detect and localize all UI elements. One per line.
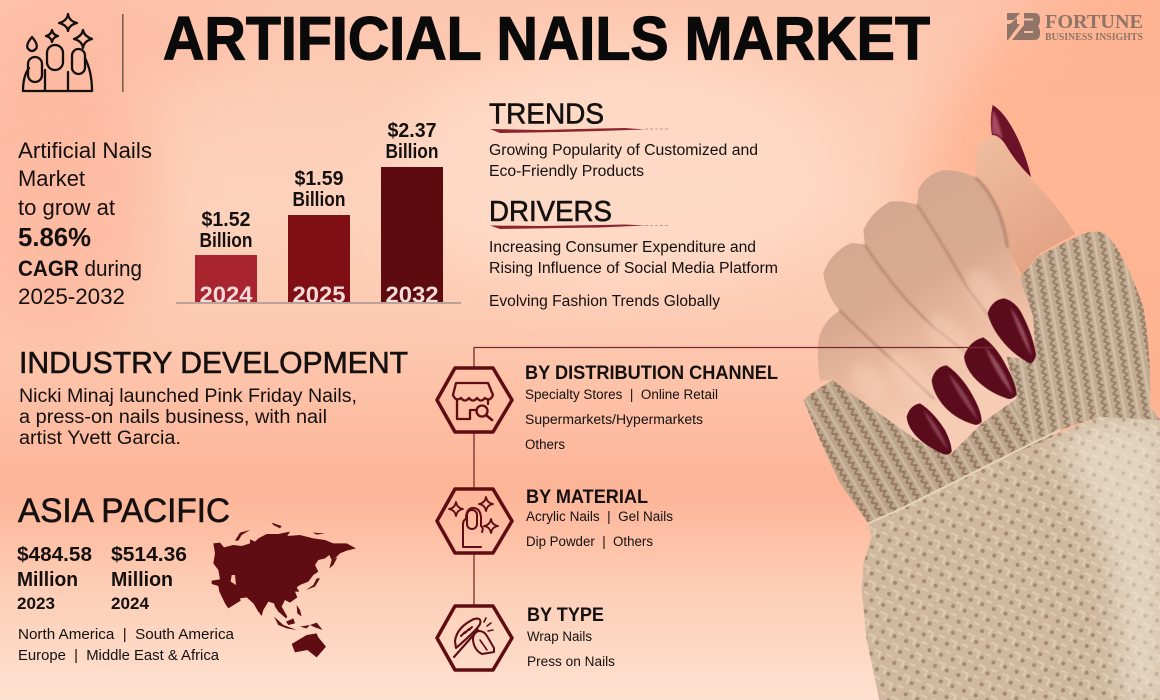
logo: Fortune Business Insights: FORTUNE (1045, 11, 1143, 33)
segment: by material: Acrylic Nails | Gel Nails (526, 509, 673, 524)
segment: by material (437, 487, 673, 553)
bar 2024: $1.52 (202, 209, 250, 231)
title: ARTIFICIAL NAILS MARKET (163, 4, 930, 72)
fingers silhouette (818, 170, 1035, 453)
sweater cuff right (1007, 231, 1160, 443)
segment: by distribution channel: Others (525, 437, 565, 452)
header divider (122, 14, 124, 92)
asia pacific: $484.58 (17, 544, 92, 566)
nail: index (988, 298, 1036, 363)
growth statement: CAGR during (18, 256, 142, 281)
bar 2032 (381, 120, 443, 308)
bar 2024 (195, 209, 257, 308)
thumb (976, 134, 1075, 275)
bar 2024: 2024 (200, 282, 252, 308)
asia pacific: Million (17, 569, 78, 591)
sweater body (862, 417, 1160, 700)
asia pacific: ASIA PACIFIC (18, 492, 230, 530)
industry development: artist Yvett Garcia. (19, 428, 181, 449)
bar 2025: 2025 (292, 282, 346, 308)
segment: by material: Dip Powder | Others (526, 534, 653, 549)
nail: little (907, 403, 952, 455)
segment: by distribution channel: BY DISTRIBUTION CHANNEL (525, 363, 778, 384)
growth statement: to grow at (18, 195, 115, 220)
drivers: Increasing Consumer Expenditure and (489, 239, 756, 256)
segment: by distribution channel: Specialty Stores | Online Retail (525, 387, 718, 402)
asia pacific: 2023 (17, 594, 55, 613)
map: Asia Pacific (212, 523, 356, 657)
bar 2032: Billion (386, 141, 438, 163)
drivers (489, 196, 778, 310)
industry development: INDUSTRY DEVELOPMENT (19, 345, 408, 380)
bar 2025 (288, 168, 350, 308)
growth statement: 5.86% (18, 222, 91, 252)
logo: Fortune Business Insights (1007, 11, 1143, 43)
connector line (474, 348, 993, 606)
segment: by distribution channel: Supermarkets/Hypermarkets (525, 412, 703, 427)
bar 2032: 2032 (386, 282, 438, 308)
segment: by distribution channel (437, 363, 778, 452)
finger shading (840, 178, 1007, 398)
header icon: nails with sparkles (23, 14, 92, 91)
industry development (19, 345, 408, 449)
cuff seam (868, 430, 1060, 523)
bar 2032: $2.37 (388, 120, 436, 142)
trends (489, 98, 758, 180)
asia pacific: 2024 (111, 594, 150, 613)
growth statement: 2025-2032 (18, 284, 125, 309)
nail: thumb (991, 105, 1031, 177)
icon: nail with sparkles (437, 489, 512, 553)
fingertip highlights (844, 263, 1015, 410)
hand and sweater photo illustration (803, 105, 1160, 700)
segment: by type: Press on Nails (527, 654, 615, 669)
asia pacific: Europe | Middle East & Africa (18, 647, 220, 664)
drivers: Rising Influence of Social Media Platform (489, 260, 778, 277)
trends: Eco-Friendly Products (489, 163, 644, 180)
growth statement: Market (18, 166, 85, 191)
logo: Fortune Business Insights: BUSINESS INSIGHTS (1045, 32, 1143, 43)
bar 2025: $1.59 (294, 168, 344, 190)
segment: by type: Wrap Nails (527, 629, 592, 644)
growth statement (18, 138, 152, 309)
bar chart: market size (176, 120, 461, 308)
icon: storefront with magnifier (437, 368, 512, 432)
trends: Growing Popularity of Customized and (489, 142, 758, 159)
growth statement: Artificial Nails (18, 138, 152, 163)
segment: by material: BY MATERIAL (526, 487, 648, 508)
industry development: Nicki Minaj launched Pink Friday Nails, (19, 386, 357, 407)
segment: by type (437, 605, 615, 670)
sweater cuff left (803, 317, 1053, 523)
bar 2024: Billion (200, 230, 252, 252)
bar 2025: Billion (292, 189, 346, 211)
industry development: a press-on nails business, with nail (19, 407, 327, 428)
segment: by type: BY TYPE (527, 605, 604, 626)
drivers: DRIVERS (489, 196, 612, 228)
trends: TRENDS (489, 98, 604, 130)
asia pacific: $514.36 (111, 544, 187, 566)
asia pacific: North America | South America (18, 626, 235, 643)
nail: middle (964, 337, 1017, 399)
sweater body highlight (1053, 418, 1160, 700)
nail: ring (932, 365, 982, 425)
drivers: Evolving Fashion Trends Globally (489, 293, 720, 310)
icon: brush and fingertip (437, 606, 512, 670)
asia pacific (17, 492, 235, 664)
asia pacific: Million (111, 569, 173, 591)
